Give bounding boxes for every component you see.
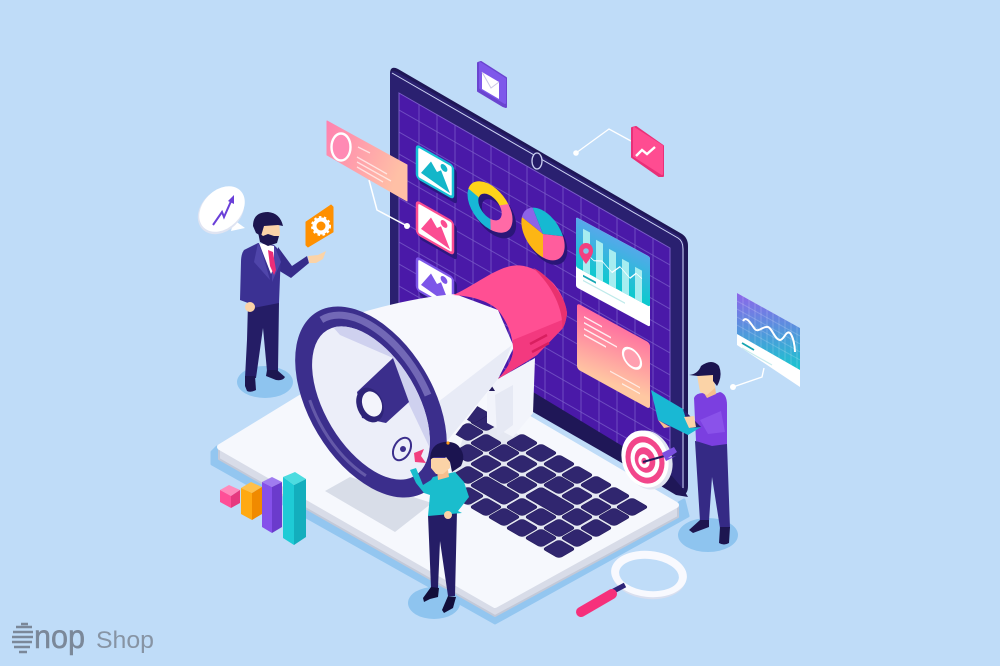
man in suit — [237, 212, 326, 398]
pink profile card on screen — [577, 303, 650, 409]
ground disc — [408, 587, 460, 619]
hair — [253, 212, 283, 236]
megaphone in hand — [414, 449, 426, 463]
teal top — [410, 468, 469, 516]
camera — [532, 153, 542, 169]
location pin — [579, 243, 593, 264]
shoes — [245, 376, 256, 392]
face — [261, 222, 280, 242]
magnifying glass — [581, 547, 689, 612]
floating wave chart with connector — [730, 290, 800, 390]
logo — [12, 618, 154, 655]
speech bubble with rising arrow — [188, 177, 254, 244]
trousers — [428, 511, 457, 596]
horn body — [360, 294, 514, 455]
line and bar chart card — [576, 217, 650, 327]
logo shop: Shop — [96, 627, 154, 654]
target with arrow — [614, 424, 680, 496]
hair — [689, 362, 721, 386]
trousers — [245, 303, 279, 378]
laptop — [212, 68, 688, 623]
heels — [423, 587, 439, 602]
jacket — [240, 243, 281, 309]
horn ring — [264, 280, 478, 524]
pie chart — [521, 198, 567, 274]
pink collar — [453, 265, 567, 379]
shirt and tie — [259, 243, 274, 274]
orange block — [241, 482, 262, 520]
laptop screen — [390, 68, 688, 497]
hands — [308, 251, 326, 263]
laptop base side — [219, 447, 678, 616]
driver — [357, 358, 409, 423]
megaphone — [295, 265, 567, 532]
picture icon pink — [417, 202, 457, 260]
picture icon purple — [417, 258, 457, 316]
screen bottom bezel — [533, 392, 688, 497]
envelope icon — [478, 62, 506, 107]
hair — [430, 442, 463, 472]
logo mark — [12, 624, 33, 652]
hands — [684, 416, 696, 428]
laptop ground shadow — [212, 447, 688, 623]
sleeve — [278, 247, 309, 278]
trousers — [695, 441, 730, 528]
pink block — [220, 485, 240, 508]
teal block — [283, 472, 306, 545]
laptop base top — [220, 340, 676, 605]
face — [431, 458, 450, 474]
beard — [258, 232, 279, 246]
sweater — [694, 392, 727, 446]
trend icon with connector — [573, 127, 663, 176]
floating card with connector — [327, 121, 410, 229]
face — [697, 375, 715, 395]
megaphone handle — [487, 358, 535, 437]
illustration: digital marketing laptop scene — [12, 61, 800, 656]
picture icon teal — [417, 146, 457, 204]
tablet — [651, 390, 701, 435]
hand on hip — [444, 511, 452, 519]
donut chart — [466, 170, 514, 244]
woman — [408, 441, 469, 619]
screen frame — [390, 68, 688, 495]
keyboard — [445, 404, 648, 559]
ground disc — [678, 518, 738, 552]
bar chart blocks — [220, 472, 306, 545]
screen panel with grid — [398, 92, 670, 450]
megaphone table shadow — [325, 477, 432, 532]
horn mouth — [312, 326, 430, 480]
ground disc — [237, 366, 293, 398]
neck — [437, 470, 449, 480]
gear icon — [306, 205, 333, 247]
man with tablet — [651, 362, 738, 552]
logo wordmark: nop — [34, 618, 85, 655]
small sound icon in mouth — [389, 435, 415, 463]
neck — [702, 386, 716, 398]
shoes — [689, 520, 709, 533]
purple block — [262, 477, 282, 533]
